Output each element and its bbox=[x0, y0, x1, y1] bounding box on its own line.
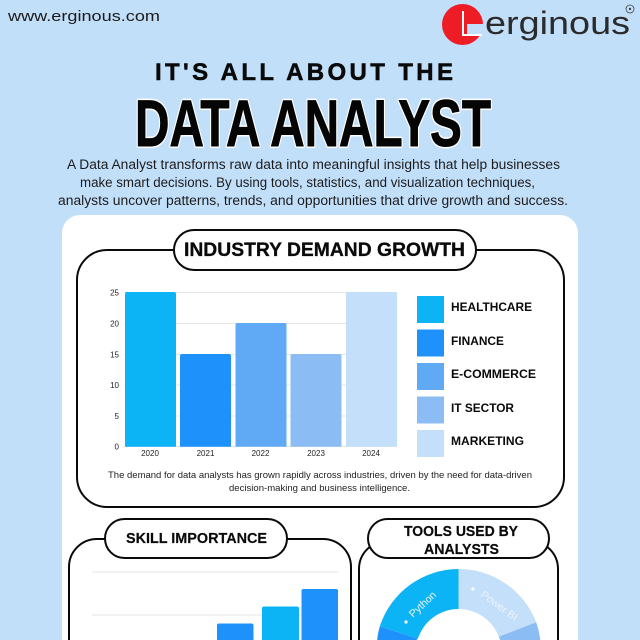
bar chart: demand by year: 25 bbox=[110, 288, 120, 298]
website url: www.erginous.com bbox=[7, 9, 160, 25]
chart caption bbox=[108, 470, 532, 494]
bar chart: demand by year: 2020 bbox=[141, 449, 159, 458]
intro paragraph: analysts uncover patterns, trends, and opportunities that drive growth and success. bbox=[58, 193, 568, 208]
panel: tools used by analysts bbox=[359, 519, 558, 640]
intro paragraph: A Data Analyst transforms raw data into meaningful insights that help businesses bbox=[67, 157, 560, 172]
logo: erginous: erginous bbox=[485, 5, 630, 41]
donut chart: tools: Power BI bbox=[478, 589, 520, 623]
title: line 2: DATA ANALYST bbox=[135, 86, 491, 160]
legend: industries: E-COMMERCE bbox=[451, 367, 536, 381]
title: line 2: DATA ANALYST bbox=[135, 86, 491, 160]
logo: erginous bbox=[442, 4, 634, 45]
bar chart: demand by year: 2023 bbox=[307, 449, 325, 458]
heading: skill importance bbox=[105, 519, 287, 558]
heading: industry demand growth bbox=[174, 230, 476, 270]
bar chart: demand by year: 0 bbox=[115, 442, 120, 452]
intro paragraph: make smart decisions. By using tools, statistics, and visualization techniques, bbox=[80, 175, 535, 190]
bar chart: demand by year bbox=[110, 288, 397, 458]
panel: industry demand growth bbox=[77, 230, 564, 507]
legend: industries: HEALTHCARE bbox=[451, 300, 532, 314]
heading: tools used by analysts: ANALYSTS bbox=[424, 542, 499, 558]
legend: industries bbox=[417, 296, 536, 457]
heading: tools used by analysts bbox=[368, 519, 549, 558]
bar chart: demand by year: 2021 bbox=[197, 449, 215, 458]
heading: industry demand growth: INDUSTRY DEMAND GROWTH bbox=[184, 240, 465, 261]
bar chart: demand by year: 20 bbox=[110, 320, 120, 328]
heading: skill importance: SKILL IMPORTANCE bbox=[126, 531, 267, 547]
bar chart: demand by year: 2022 bbox=[252, 449, 270, 458]
title: line 1: IT'S ALL ABOUT THE bbox=[155, 59, 453, 86]
bar chart: demand by year: 2024 bbox=[362, 449, 380, 458]
chart caption: decision-making and business intelligence. bbox=[229, 483, 410, 494]
intro paragraph bbox=[58, 157, 568, 208]
donut chart: tools: Python bbox=[407, 589, 439, 620]
bar chart: demand by year: 10 bbox=[110, 381, 120, 390]
panel: white content card bbox=[62, 215, 578, 640]
bar chart: demand by year: 5 bbox=[115, 412, 120, 421]
panel: skill importance bbox=[69, 519, 351, 640]
bar chart: skills bbox=[92, 572, 338, 640]
bar chart: demand by year: 15 bbox=[110, 350, 120, 360]
chart caption: The demand for data analysts has grown rapidly across industries, driven by the need for data-driven bbox=[108, 470, 532, 481]
legend: industries: MARKETING bbox=[451, 434, 524, 448]
heading: tools used by analysts: TOOLS USED BY bbox=[404, 524, 518, 540]
legend: industries: IT SECTOR bbox=[451, 401, 514, 415]
donut chart: tools bbox=[377, 569, 540, 640]
legend: industries: FINANCE bbox=[451, 334, 504, 348]
